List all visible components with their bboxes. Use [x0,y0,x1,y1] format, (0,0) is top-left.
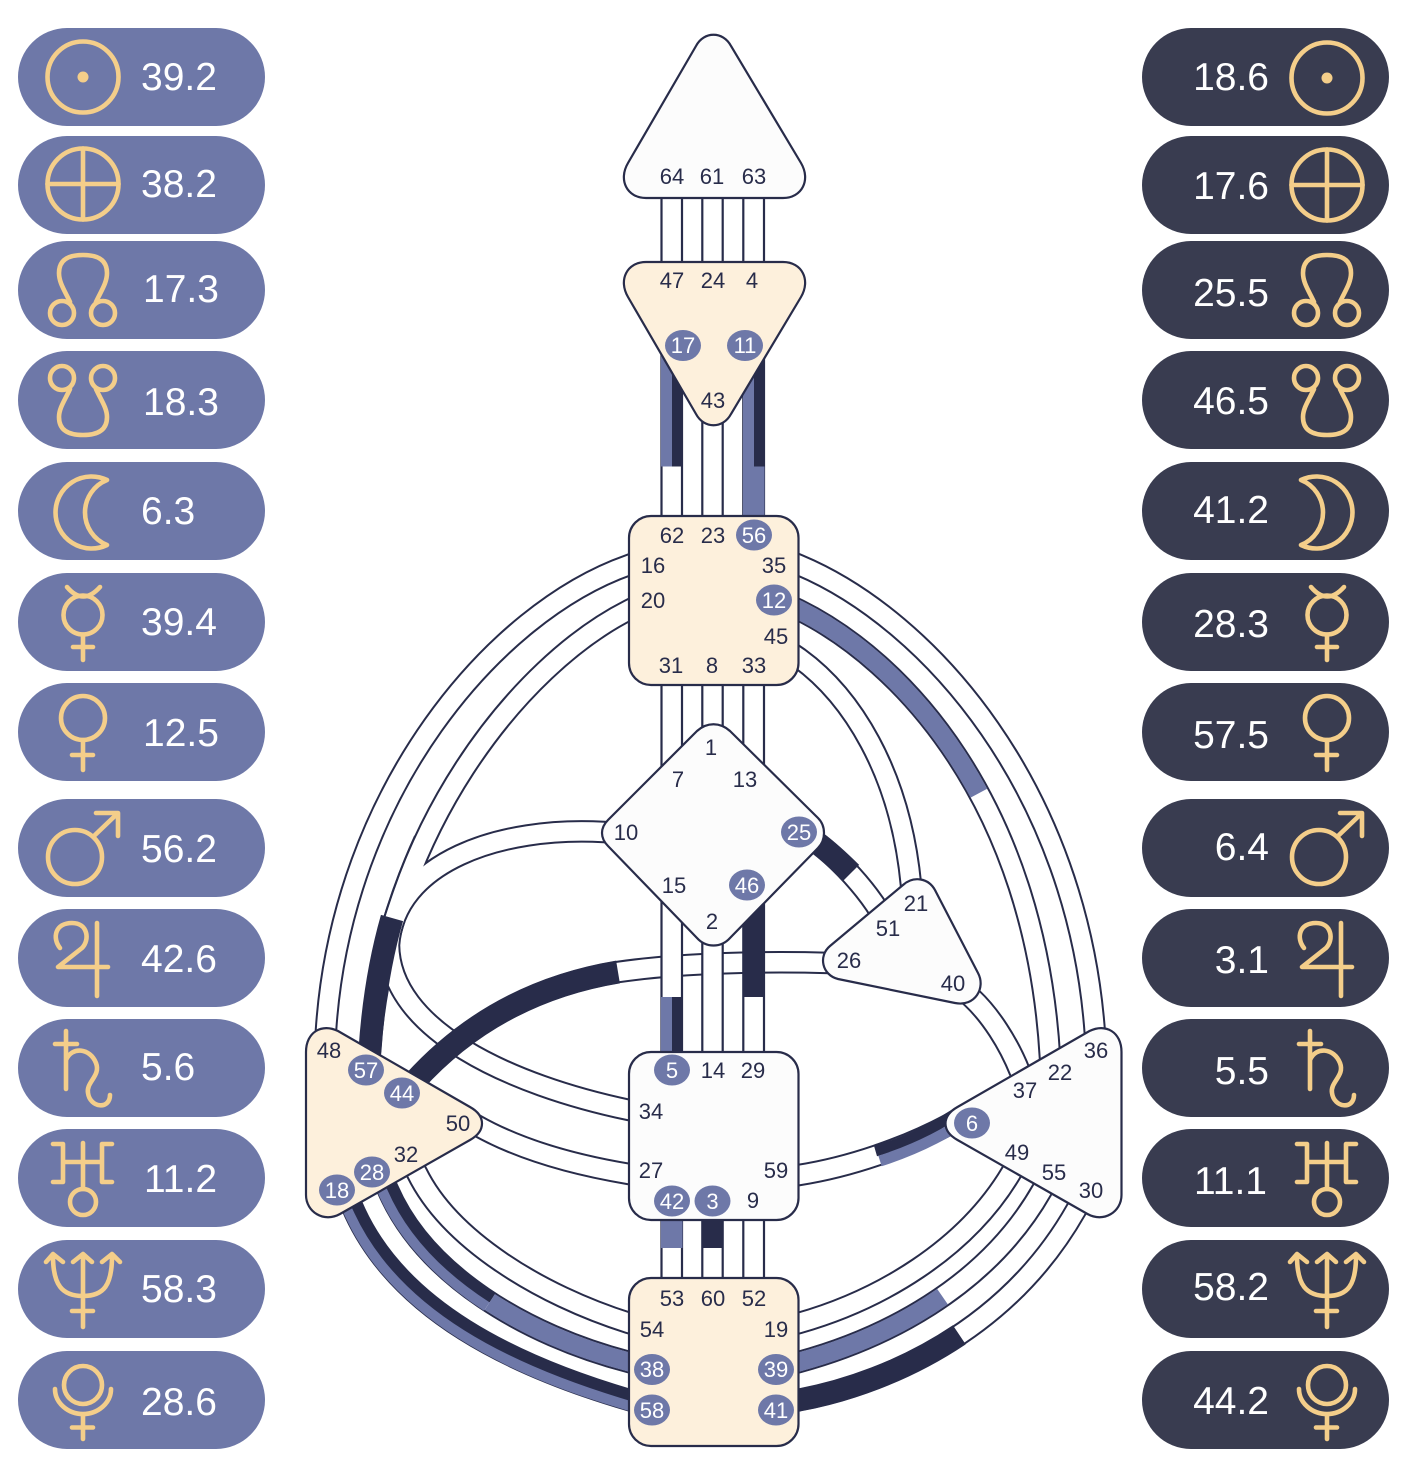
center: g: 13 [733,767,757,792]
pill: moon 41.2: 41.2 [1193,489,1269,532]
pill: neptune 58.3 [18,1240,265,1338]
center: ajna: 11 [734,333,756,358]
center: spleen: 32 [394,1142,418,1167]
pill: saturn 5.5 [1142,1019,1389,1117]
center: throat [629,516,798,685]
pill: venus 12.5 [18,683,265,781]
center: root: 54 [640,1317,664,1342]
center: throat: 62 [660,523,684,548]
center: root: 41 [764,1398,788,1423]
pill: earth 17.6 [1142,136,1389,234]
center: root: 53 [660,1286,684,1311]
center: spleen: 48 [317,1038,341,1063]
center: g: 25 [787,820,811,845]
pill: earth 17.6: 17.6 [1193,165,1269,208]
center: g: 10 [614,820,638,845]
pill: venus 57.5 [1142,683,1389,781]
center: sacral: 29 [741,1058,765,1083]
pill: mercury 39.4: 39.4 [141,601,217,644]
center: root: 19 [764,1317,788,1342]
center: root: 52 [742,1286,766,1311]
center: solar plexus: 55 [1042,1160,1066,1185]
center: solar plexus: 30 [1079,1178,1103,1203]
pill: south node 46.5: 46.5 [1193,380,1269,423]
pill: saturn 5.5: 5.5 [1215,1050,1269,1093]
pill: uranus 11.1 [1142,1129,1389,1227]
pill: moon 6.3 [18,462,265,560]
center: throat: 20 [641,588,665,613]
center: root: 60 [701,1286,725,1311]
pill: north node 25.5 [1142,241,1389,339]
pill: sun 39.2 [18,28,265,126]
pill: mercury 39.4 [18,573,265,671]
pill: jupiter 42.6 [18,909,265,1007]
chart: bodygraph channels [325,198,1096,1411]
center: throat: 8 [706,653,718,678]
pill: south node 46.5 [1142,351,1389,449]
center: heart: 51 [876,916,900,941]
pill: north node 25.5: 25.5 [1193,272,1269,315]
pill: sun 18.6 [1142,28,1389,126]
center: ajna: 24 [701,268,725,293]
center: ajna [624,262,805,425]
center: heart [823,879,981,1004]
center: throat: 16 [641,553,665,578]
center: throat: 12 [762,588,786,613]
pill: uranus 11.2: 11.2 [144,1158,217,1201]
center: throat: 45 [764,624,788,649]
pill: pluto 44.2: 44.2 [1193,1380,1269,1423]
pill: sun 39.2: 39.2 [141,56,217,99]
curved channel outlines [325,557,1096,1406]
center: solar plexus [946,1028,1122,1217]
left edge of channel 20-57 at the 10-34 junction [383,836,415,922]
pill: moon 6.3: 6.3 [141,490,195,533]
center: spleen: 57 [354,1058,378,1083]
center: ajna: 4 [746,268,758,293]
pill: mercury 28.3: 28.3 [1193,603,1269,646]
pill: jupiter 3.1: 3.1 [1215,939,1269,982]
pill: north node 17.3 [18,241,265,339]
center: heart: 26 [837,948,861,973]
center: g: 7 [672,767,684,792]
center: sacral: 27 [639,1158,663,1183]
center: g: 15 [662,873,686,898]
center: ajna: 47 [660,268,684,293]
center: throat: 56 [742,523,766,548]
center: head: 61 [700,164,724,189]
pill: pluto 44.2 [1142,1351,1389,1449]
pill: mars 6.4 [1142,799,1389,897]
center: root: 39 [764,1357,788,1382]
center: sacral: 3 [706,1189,719,1214]
center: sacral: 5 [666,1058,678,1083]
pill: pluto 28.6 [18,1351,265,1449]
center: sacral [629,1052,798,1220]
pill: moon 41.2 [1142,462,1389,560]
center: spleen [306,1028,482,1217]
center: root: 38 [640,1357,664,1382]
center: root: 58 [640,1398,664,1423]
pill: mercury 28.3 [1142,573,1389,671]
center: throat: 31 [659,653,683,678]
pill: uranus 11.1: 11.1 [1194,1160,1267,1203]
panel: right column of planet activations [1142,28,1389,1449]
center: head: 64 [660,164,684,189]
center: spleen: 44 [390,1081,414,1106]
pill: venus 57.5: 57.5 [1193,714,1269,757]
center: ajna: 43 [701,388,725,413]
center: sacral: 14 [701,1058,725,1083]
center: head [624,35,805,198]
pill: earth 38.2: 38.2 [141,163,217,206]
center: solar plexus: 49 [1005,1140,1029,1165]
center: solar plexus: 36 [1084,1038,1108,1063]
center: spleen: 28 [360,1160,384,1185]
activated channel segments [342,601,979,1411]
pill: earth 38.2 [18,136,265,234]
pill: saturn 5.6: 5.6 [141,1046,195,1089]
pill: neptune 58.2 [1142,1240,1389,1338]
pill: sun 18.6: 18.6 [1193,56,1269,99]
center: throat: 33 [742,653,766,678]
pill: pluto 28.6: 28.6 [141,1381,217,1424]
center: sacral: 34 [639,1099,663,1124]
center: throat: 23 [701,523,725,548]
pill: mars 6.4: 6.4 [1215,826,1269,869]
pill: south node 18.3 [18,351,265,449]
pill: saturn 5.6 [18,1019,265,1117]
curved channel interiors [325,557,1096,1406]
center: spleen: 18 [325,1178,349,1203]
center: solar plexus: 37 [1013,1078,1037,1103]
pill: venus 12.5: 12.5 [143,712,219,755]
center: sacral: 9 [747,1188,759,1213]
center: solar plexus: 6 [966,1111,978,1136]
center: root [629,1278,798,1446]
pill: uranus 11.2 [18,1129,265,1227]
center: heart: 21 [904,891,928,916]
pill: neptune 58.3: 58.3 [141,1268,217,1311]
vertical channels [661,198,765,1283]
center: ajna: 17 [671,333,695,358]
pill: jupiter 3.1 [1142,909,1389,1007]
center: g [602,724,824,946]
center: spleen: 50 [446,1111,470,1136]
center: sacral: 42 [660,1189,684,1214]
center: head: 63 [742,164,766,189]
panel: left column of planet activations [18,28,265,1449]
pill: south node 18.3: 18.3 [143,381,219,424]
center: g: 1 [705,735,717,760]
pill: north node 17.3: 17.3 [143,268,219,311]
pill: mars 56.2 [18,799,265,897]
center: g: 46 [735,873,759,898]
center: sacral: 59 [764,1158,788,1183]
pill: neptune 58.2: 58.2 [1193,1266,1269,1309]
center: heart: 40 [941,971,965,996]
center: throat: 35 [762,553,786,578]
center: solar plexus: 22 [1048,1060,1072,1085]
center: g: 2 [706,909,718,934]
pill: mars 56.2: 56.2 [141,828,217,871]
pill: jupiter 42.6: 42.6 [141,938,217,981]
